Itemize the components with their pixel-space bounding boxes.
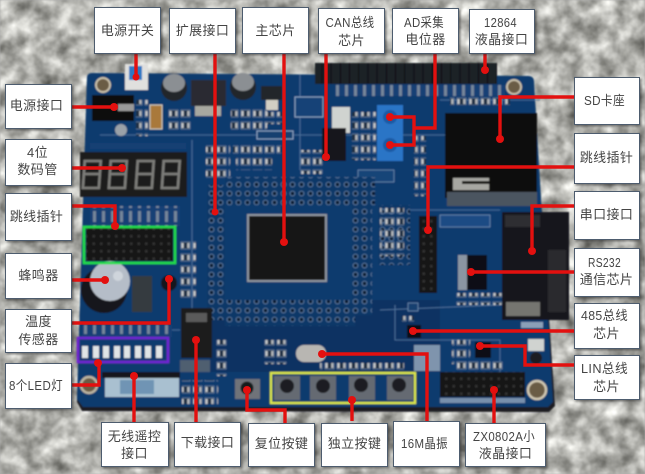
label: RS232 chip: RS232 bbox=[588, 255, 621, 270]
LED row bbox=[82, 346, 162, 358]
label: expansion port bbox=[170, 8, 236, 54]
label: main chip: 主芯片 bbox=[255, 23, 296, 38]
leader: power switch bbox=[132, 53, 140, 80]
DB9 serial connector bbox=[502, 212, 569, 320]
label: 16M crystal: 16M晶振 bbox=[401, 436, 448, 451]
label: download port: 下载接口 bbox=[181, 435, 234, 450]
label: CAN chip: CAN总线 bbox=[326, 15, 374, 30]
leader: expansion port bbox=[212, 53, 218, 216]
highlight: yellow key box bbox=[271, 373, 415, 403]
AD potentiometers bbox=[377, 105, 403, 161]
label: wireless port bbox=[102, 422, 168, 466]
label: 16M crystal bbox=[394, 422, 460, 466]
board: darker lower centre area bbox=[210, 300, 440, 372]
screw holes bbox=[96, 78, 110, 92]
label: 485 chip: 芯片 bbox=[593, 326, 620, 341]
label: RS232 chip bbox=[574, 248, 640, 296]
label: SD socket bbox=[574, 78, 640, 124]
label: temperature sensor: 传感器 bbox=[18, 332, 59, 347]
leader: temperature sensor bbox=[71, 275, 173, 323]
jumper row resistors bbox=[90, 206, 180, 226]
label: 4-digit display bbox=[6, 140, 72, 186]
leader: left jumper pins bbox=[71, 206, 119, 230]
silkscreen pin labels under top connector bbox=[335, 85, 505, 96]
leader: 4-digit display bbox=[71, 164, 126, 172]
silkscreen SOURCE box bbox=[257, 131, 293, 139]
label: expansion port: 扩展接口 bbox=[176, 23, 229, 38]
silkscreen LCD box bbox=[295, 97, 323, 117]
bottom LCD connector bbox=[440, 372, 525, 397]
leader: power jack bbox=[71, 103, 118, 111]
label: right jumper pins bbox=[574, 134, 640, 184]
label: ZX0802A port: ZX0802A小 bbox=[473, 429, 535, 444]
main pin grid bbox=[225, 177, 375, 205]
label: power switch bbox=[94, 8, 160, 54]
leader: SD socket bbox=[496, 97, 574, 143]
leader: 485 chip bbox=[409, 327, 574, 335]
label: 8 LEDs: 8个LED灯 bbox=[9, 378, 63, 393]
label: left jumper pins: 跳线插针 bbox=[10, 209, 63, 224]
RS232 chip bbox=[467, 255, 487, 290]
label: download port bbox=[174, 422, 240, 466]
label: serial port: 串口接口 bbox=[580, 207, 633, 222]
485 white connector bbox=[414, 345, 440, 371]
LIN chip bbox=[475, 342, 491, 358]
label: reset key bbox=[248, 424, 314, 466]
label: CAN chip bbox=[318, 8, 384, 54]
leader: buzzer bbox=[71, 276, 109, 284]
label: independent keys bbox=[322, 424, 388, 466]
voltage regulator bbox=[191, 80, 226, 106]
leader: main chip bbox=[280, 53, 288, 246]
black top LCD connector bbox=[315, 63, 497, 84]
main chip bbox=[247, 214, 327, 282]
board: blue PCB bbox=[77, 73, 553, 407]
label: 4-digit display: 数码管 bbox=[17, 162, 58, 177]
label: temperature sensor bbox=[6, 310, 72, 352]
seven segment display bbox=[80, 152, 187, 197]
CAN connector bbox=[332, 107, 350, 133]
DC power jack bbox=[92, 95, 134, 121]
electrolytic capacitors bbox=[161, 75, 187, 101]
leader: CAN chip bbox=[322, 53, 330, 161]
label: 4-digit display: 4位 bbox=[27, 145, 48, 160]
label: AD potentiometer: AD采集 bbox=[404, 15, 444, 30]
label: AD potentiometer: 电位器 bbox=[405, 32, 446, 47]
label: temperature sensor: 温度 bbox=[25, 314, 52, 329]
board: shadow edge bbox=[77, 75, 555, 412]
leader: LIN chip bbox=[476, 342, 574, 365]
leader: RS232 chip bbox=[467, 268, 574, 276]
development board photo bbox=[77, 63, 569, 412]
label: wireless port: 无线遥控 bbox=[108, 429, 161, 444]
leader: independent keys bbox=[348, 396, 356, 421]
temperature sensor bbox=[161, 275, 177, 291]
485 chip bbox=[407, 325, 421, 338]
leader: AD potentiometer bbox=[386, 53, 435, 149]
label: 12864 port: 液晶接口 bbox=[475, 32, 528, 47]
label: SD socket: SD卡座 bbox=[584, 93, 625, 108]
label: serial port bbox=[574, 192, 640, 240]
leader: right jumper pins bbox=[424, 167, 574, 234]
right jumper header bbox=[419, 216, 437, 293]
label: 12864 port bbox=[470, 10, 534, 54]
independent keys bbox=[274, 376, 413, 400]
wireless module socket bbox=[102, 372, 180, 378]
label: wireless port: 接口 bbox=[121, 446, 148, 461]
label: buzzer: 蜂鸣器 bbox=[18, 268, 59, 283]
leader: 12864 port bbox=[481, 53, 489, 74]
resistor row bbox=[82, 325, 172, 337]
power switch bbox=[125, 64, 148, 90]
transistor block bbox=[132, 276, 152, 312]
label: independent keys: 独立按键 bbox=[328, 436, 381, 451]
label: 12864 port: 12864 bbox=[484, 15, 517, 30]
SD card socket bbox=[445, 113, 537, 198]
download header bbox=[181, 308, 212, 358]
leader: wireless port bbox=[130, 372, 138, 422]
label: AD potentiometer bbox=[392, 8, 458, 54]
reset button bbox=[235, 379, 260, 399]
label: left jumper pins bbox=[6, 194, 72, 240]
label: RS232 chip: 通信芯片 bbox=[580, 272, 633, 287]
16M crystal bbox=[296, 345, 326, 362]
label: reset key: 复位按键 bbox=[255, 436, 308, 451]
label: 485 chip: 485总线 bbox=[581, 308, 628, 323]
leader: serial port bbox=[528, 206, 574, 255]
black jumper header in green box bbox=[86, 228, 173, 261]
small parts near power bbox=[136, 100, 148, 136]
label: right jumper pins: 跳线插针 bbox=[580, 150, 633, 165]
leader: LED bbox=[71, 359, 102, 385]
label: 485 chip bbox=[574, 304, 640, 348]
label: main chip bbox=[242, 8, 308, 54]
label: LIN chip: LIN总线 bbox=[581, 361, 628, 376]
label: CAN chip: 芯片 bbox=[338, 33, 365, 48]
label: 8 LEDs bbox=[6, 364, 72, 408]
label: buzzer bbox=[6, 254, 72, 298]
label: LIN chip bbox=[574, 356, 640, 400]
label: ZX0802A port: 液晶接口 bbox=[479, 446, 532, 461]
label: ZX0802A port bbox=[466, 424, 546, 466]
leader: download port bbox=[192, 336, 200, 422]
leader: reset key bbox=[243, 386, 285, 423]
leader: ZX0802A port bbox=[490, 386, 498, 423]
buzzer bbox=[81, 261, 130, 313]
label: power jack bbox=[6, 84, 72, 128]
leader: 16M crystal bbox=[318, 350, 427, 421]
label: power jack: 电源接口 bbox=[10, 98, 63, 113]
label: power switch: 电源开关 bbox=[101, 23, 154, 38]
highlight: purple LED box bbox=[78, 338, 168, 362]
highlight: green jumper box bbox=[84, 227, 175, 263]
label: LIN chip: 芯片 bbox=[593, 379, 620, 394]
